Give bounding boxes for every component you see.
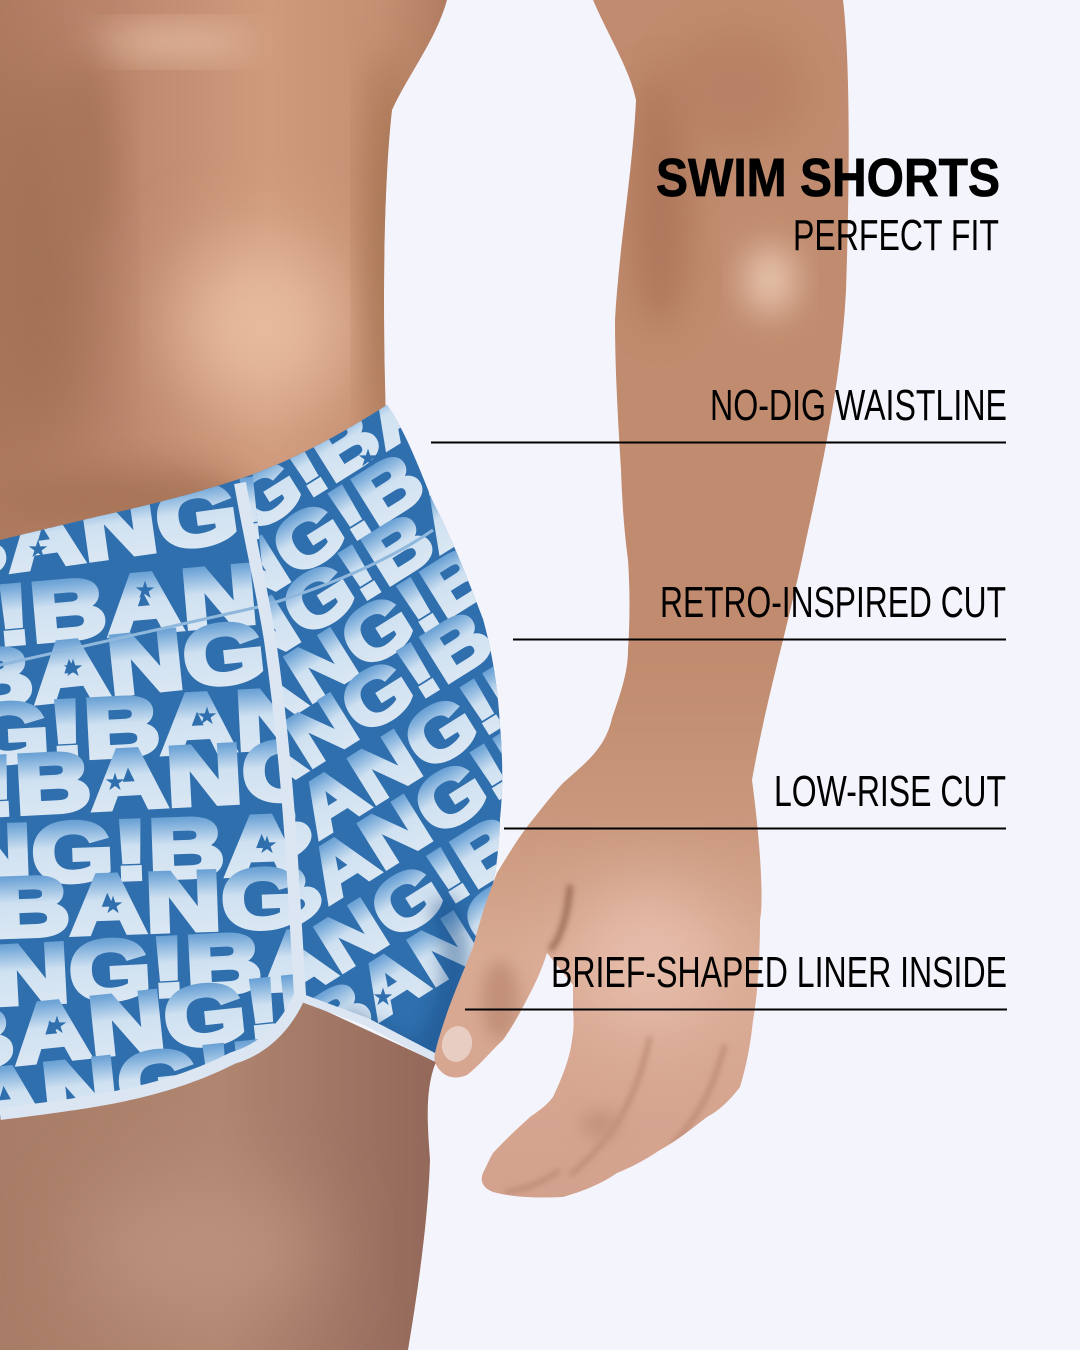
photo: swim shorts with BANG! print <box>0 405 502 1120</box>
stars in the print: ★ <box>357 445 379 472</box>
photo: swim shorts with BANG! print: NG!BANG! <box>204 318 628 626</box>
title: SWIM SHORTS <box>656 148 1000 208</box>
stars in the print: ★ <box>104 769 126 796</box>
stars in the print: ★ <box>62 655 84 682</box>
thumbnail <box>439 1023 475 1065</box>
stars in the print <box>27 445 394 1039</box>
photo: swim shorts with BANG! print: ANG!BANG <box>249 696 701 1022</box>
photo: swim shorts with BANG! print: ANG!BANG! <box>219 475 696 817</box>
stars in the print: ★ <box>134 577 156 604</box>
photo: swim shorts with BANG! print: G!BANG! <box>214 274 584 549</box>
photo: model thigh <box>0 1000 436 1350</box>
photo: swim shorts with BANG! print: NG!BANG <box>0 904 497 1024</box>
photo: swim shorts with BANG! print: !BANG!B <box>264 812 630 1084</box>
stars in the print: ★ <box>256 832 278 859</box>
stars in the print: ★ <box>196 703 218 730</box>
photo: model torso <box>0 0 447 560</box>
stars in the print: ★ <box>372 984 394 1011</box>
white side piping and hem trim <box>0 483 300 1114</box>
stars in the print: ★ <box>46 1012 68 1039</box>
photo: swim shorts with BANG! print: BANG! <box>0 850 340 956</box>
photo: model arm and hand <box>434 0 849 1197</box>
photo: swim shorts with BANG! print: BANG!BANG <box>229 527 735 887</box>
subtitle: PERFECT FIT <box>793 211 999 260</box>
photo: swim shorts with BANG! print: NG!BANG! <box>214 378 638 686</box>
photo: swim shorts with BANG! print: BANG!BANG <box>239 592 745 952</box>
photo: swim shorts with BANG! print: !BANG! <box>0 537 377 663</box>
stars in the print: ★ <box>27 536 49 563</box>
stars in the print: ★ <box>102 892 124 919</box>
photo: swim shorts with BANG! print: ANG!BANG! <box>219 410 696 752</box>
